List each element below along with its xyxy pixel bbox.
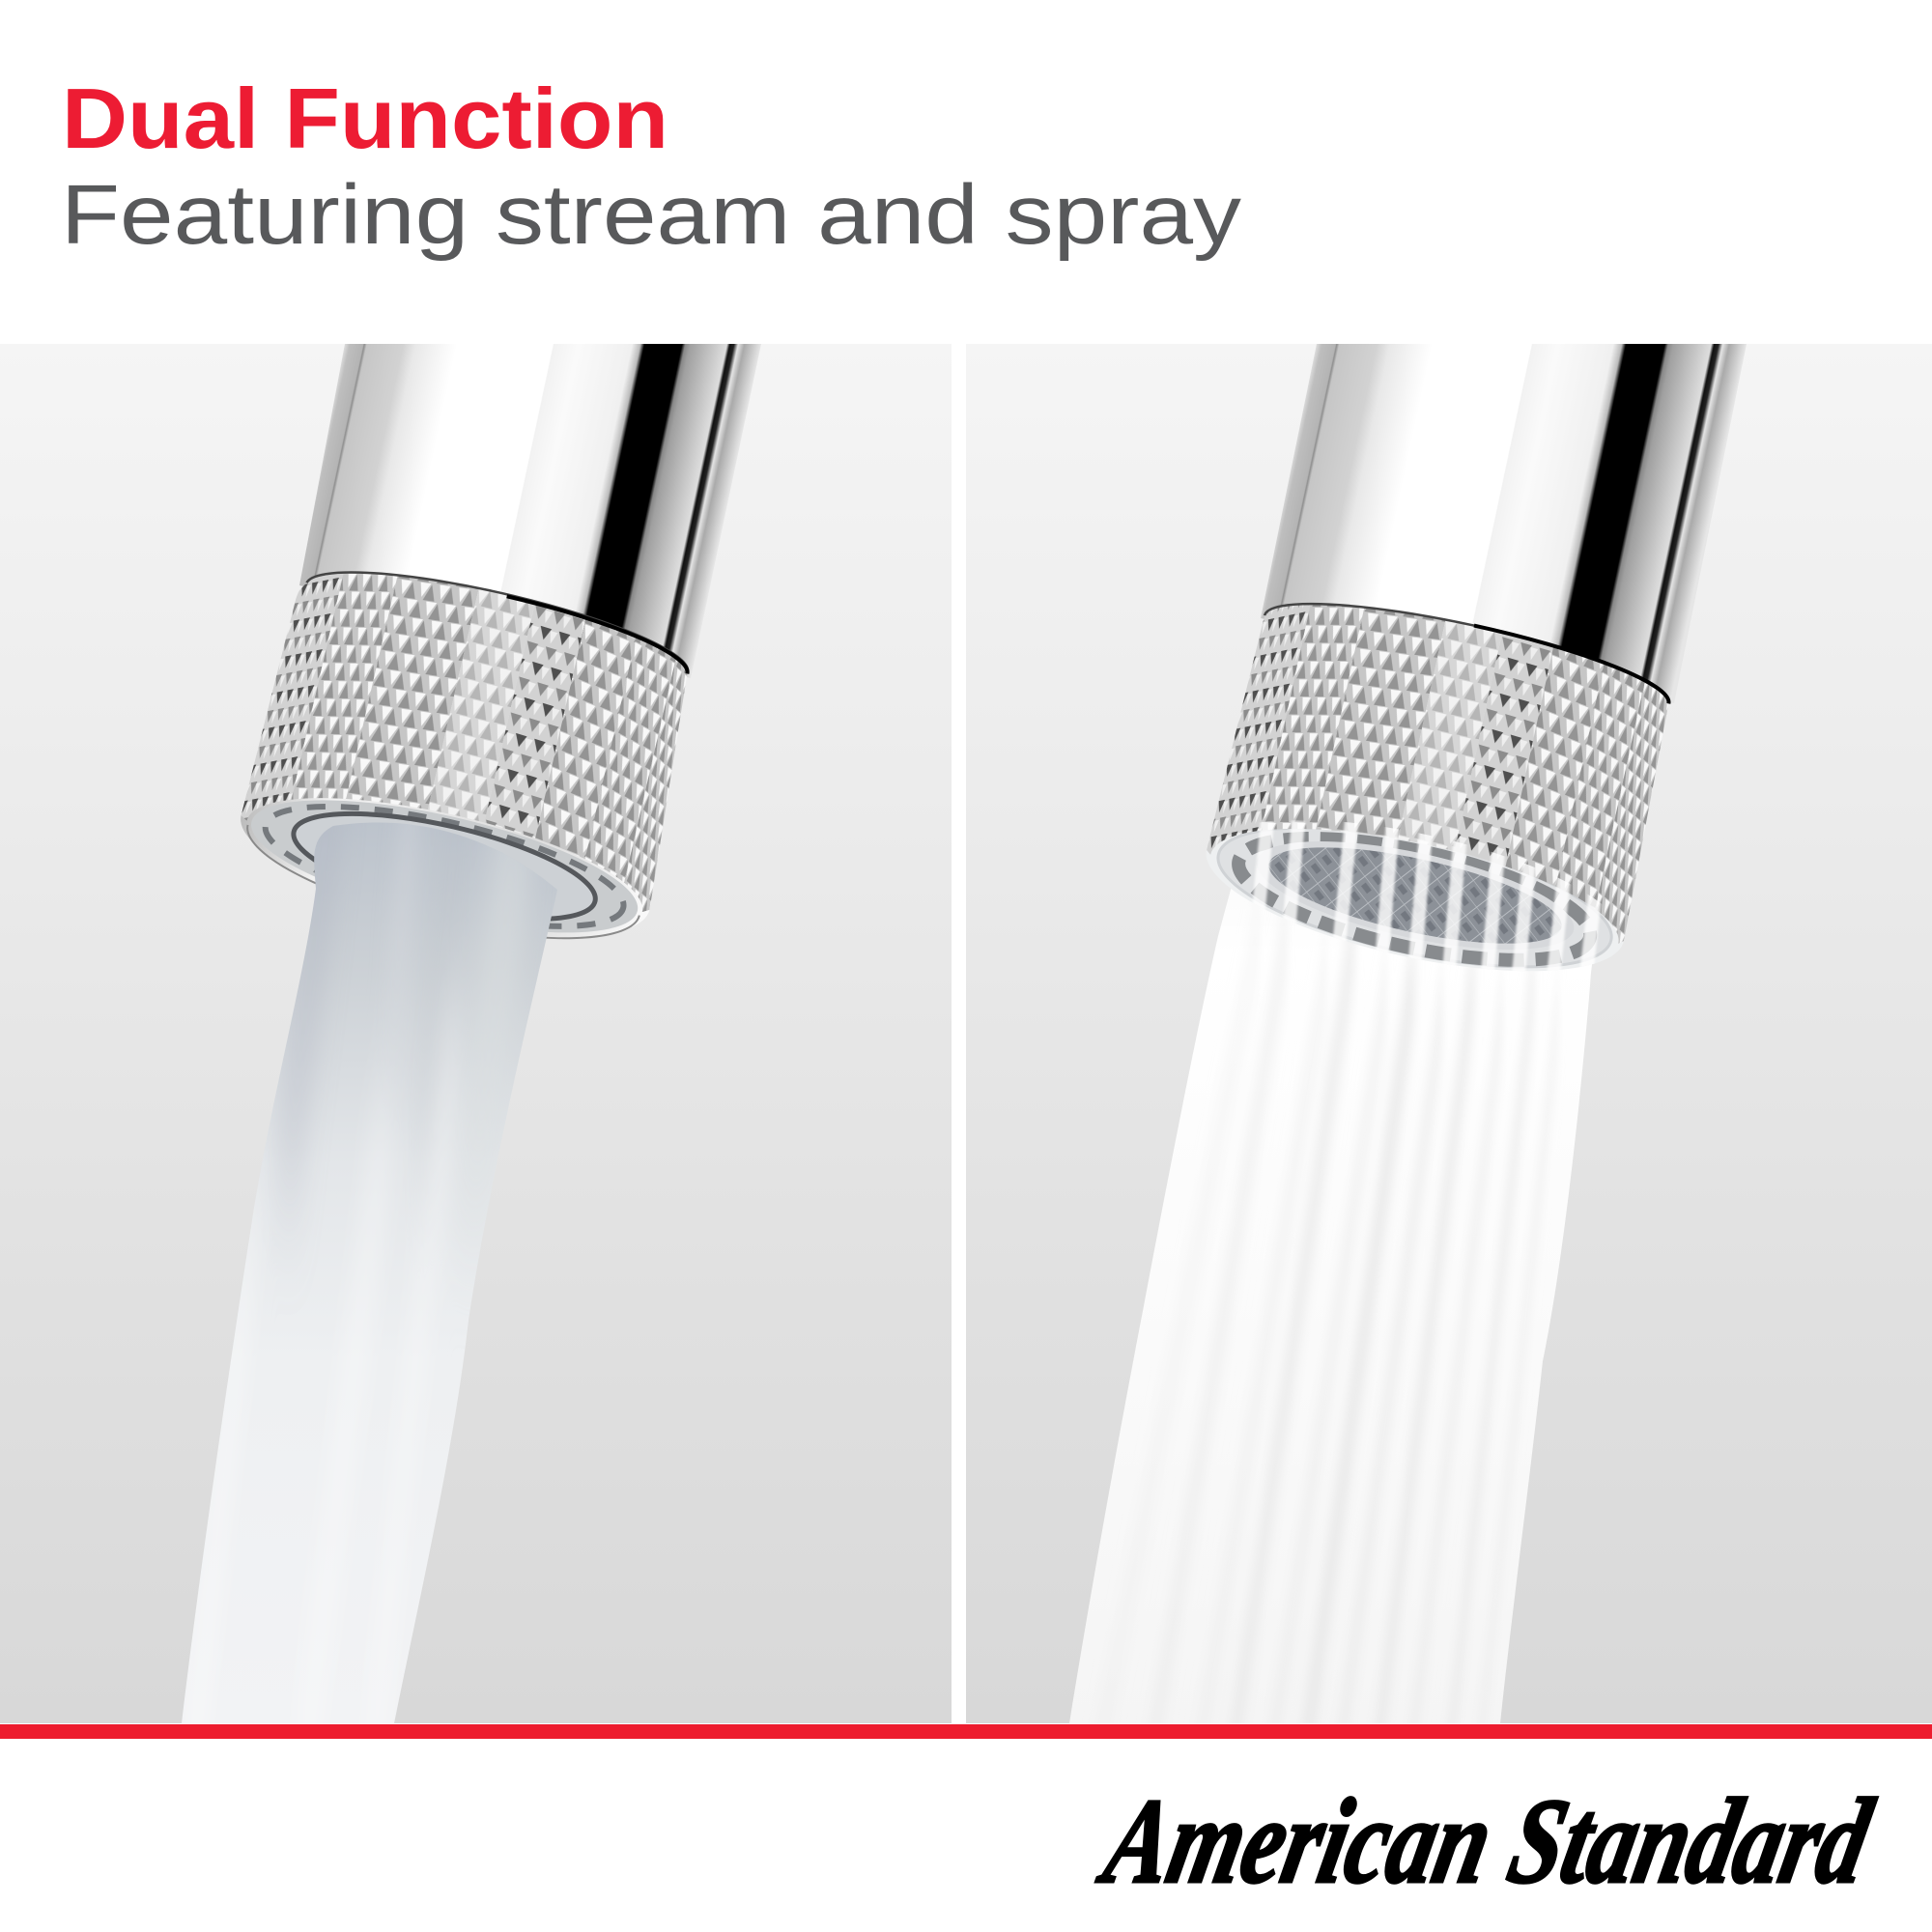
panel: spray mode: [966, 344, 1932, 1835]
faucet spout right: [1261, 344, 1747, 703]
spray jets over nozzle: [1252, 820, 1602, 971]
knurled collar left: [242, 571, 690, 912]
subheading: Featuring stream and spray: Featuring stream and spray: [61, 168, 1242, 262]
water stream: [182, 823, 556, 1723]
aerator rim left: [228, 758, 663, 968]
faucet spout left: [299, 344, 761, 678]
panel background right: [966, 344, 1932, 1723]
panel background left: [0, 344, 952, 1723]
panel: stream mode: [0, 344, 952, 1797]
aerator nozzle right: [1193, 789, 1637, 1002]
knurled collar right: [1207, 603, 1671, 944]
water spray: [1069, 889, 1592, 1723]
heading: Dual Function: Dual Function: [62, 71, 668, 166]
red divider bar: [0, 1724, 1932, 1739]
